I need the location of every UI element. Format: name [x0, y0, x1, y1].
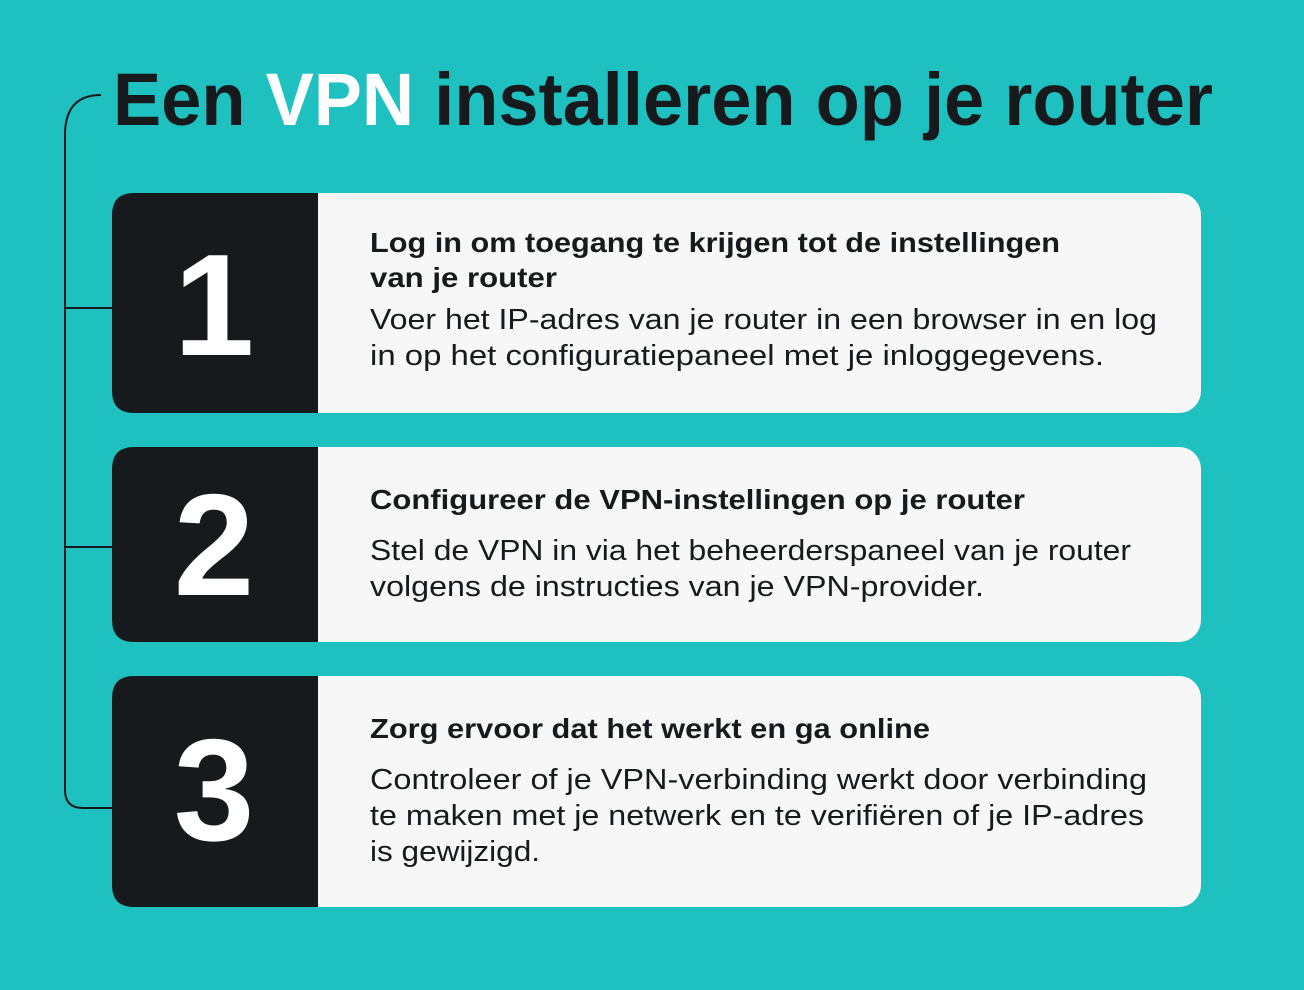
body 3: is gewijzigd.: [370, 836, 540, 868]
number 1: 1: [174, 224, 254, 386]
number 2: 2: [174, 464, 254, 626]
card 3: [112, 676, 1201, 907]
body 2: volgens de instructies van je VPN-provider.: [370, 571, 984, 603]
heading 1: van je router: [370, 262, 557, 293]
heading 3: Zorg ervoor dat het werkt en ga online: [370, 713, 930, 744]
title: Een VPN installeren op je router: [113, 58, 1213, 141]
heading 2: Configureer de VPN-instellingen op je router: [370, 484, 1025, 515]
connector line: [65, 95, 112, 808]
number 3: 3: [174, 709, 254, 871]
body 1: Voer het IP-adres van je router in een browser in en log: [370, 304, 1157, 336]
card 2: [112, 447, 1201, 642]
body 2: Stel de VPN in via het beheerderspaneel van je router: [370, 535, 1131, 567]
heading 1: Log in om toegang te krijgen tot de instellingen: [370, 227, 1060, 258]
body 3: te maken met je netwerk en te verifiëren of je IP-adres: [370, 800, 1144, 832]
body 1: in op het configuratiepaneel met je inloggegevens.: [370, 340, 1104, 372]
body 3: Controleer of je VPN-verbinding werkt door verbinding: [370, 764, 1147, 796]
card 1: [112, 193, 1201, 413]
